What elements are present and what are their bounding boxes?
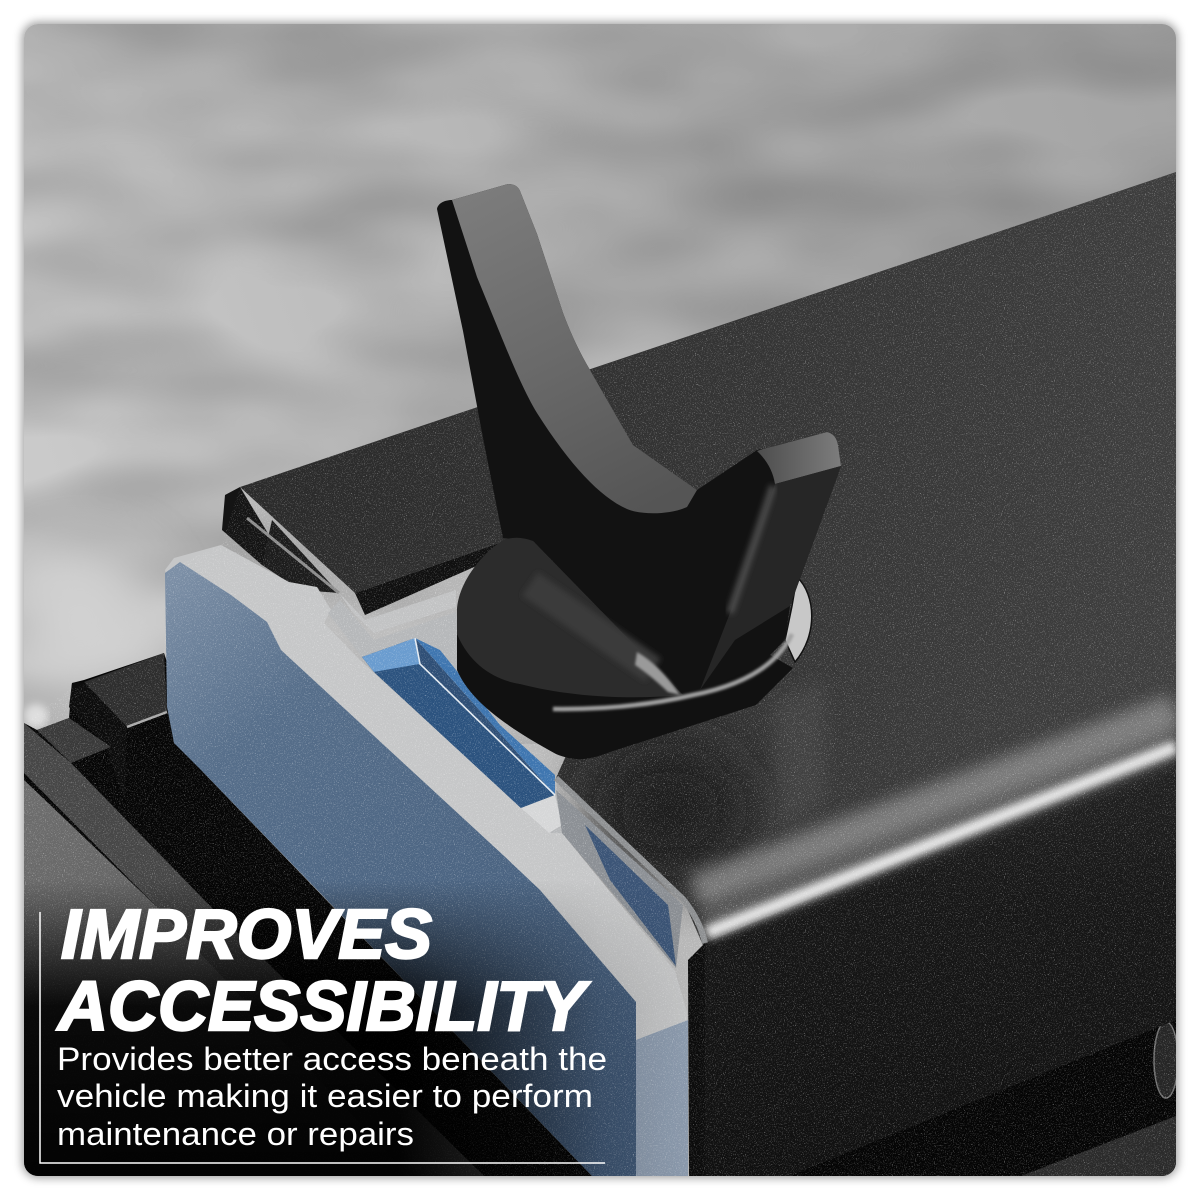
puck side and washer fillet (457, 634, 793, 759)
beam front face (705, 745, 1176, 1176)
description text: maintenance or repairs (57, 1116, 414, 1152)
caption frame lines (40, 912, 605, 1163)
heading: ACCESSIBILITY (56, 967, 590, 1045)
blue tube opening (362, 638, 562, 833)
description text (57, 1041, 607, 1152)
dark gap below beam (789, 1020, 1176, 1176)
hook blade (437, 184, 841, 695)
beam top shading (590, 680, 825, 880)
heading: IMPROVES (61, 895, 432, 973)
silver channel (328, 600, 562, 833)
heading (56, 895, 590, 1045)
washer highlight arc (553, 634, 792, 709)
lower tube behind plate (556, 790, 683, 968)
lower-left machine base (24, 653, 592, 1176)
beam edge highlights (695, 712, 1176, 933)
blue plate end (165, 545, 688, 1176)
description text: vehicle making it easier to perform (57, 1078, 593, 1114)
description text: Provides better access beneath the (57, 1041, 607, 1077)
hole with silver crescent (785, 577, 812, 662)
dark caption gradient (24, 880, 704, 1180)
puck top surface (457, 538, 683, 697)
beam corner edge (556, 778, 705, 1176)
cap plate left side and lip (222, 487, 499, 633)
beam top surface (240, 172, 1176, 950)
